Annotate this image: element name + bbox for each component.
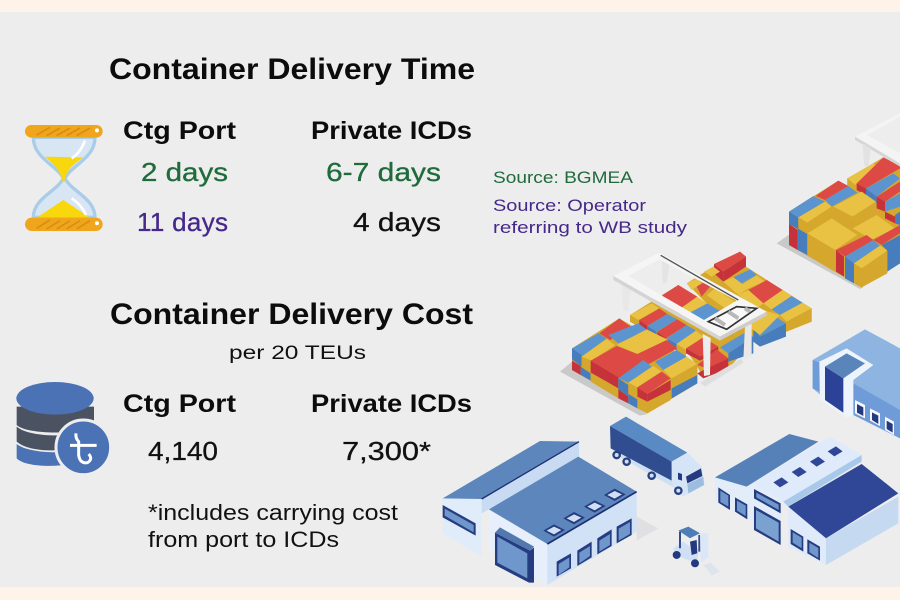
source: operator: referring to WB study	[493, 218, 688, 237]
front containers	[572, 318, 697, 413]
column heading: Ctg Port: Ctg Port	[123, 117, 237, 145]
icon: hourglass	[25, 125, 103, 231]
footnote: *includes carrying cost	[148, 500, 398, 525]
value: 7,300*: 7,300*	[342, 436, 431, 466]
illustration: container yard back stack with crane	[777, 113, 900, 289]
source: operator	[493, 196, 688, 237]
illustration: truck, forklift and warehouses right	[610, 417, 898, 576]
heading: container delivery cost: Container Delivery Cost	[110, 298, 473, 331]
illustration: warehouse bottom left	[443, 441, 658, 585]
crane legs and beam	[613, 253, 767, 387]
warehouse bottom right	[715, 434, 898, 565]
heading: container delivery time: Container Delivery Time	[109, 53, 475, 86]
value: 11 days: 11 days	[137, 207, 228, 237]
value: 2 days: 2 days	[141, 157, 228, 187]
column heading: Ctg Port: Ctg Port	[123, 390, 237, 418]
back containers	[630, 252, 812, 378]
source: BGMEA: Source: BGMEA	[493, 168, 634, 187]
source: operator: Source: Operator	[493, 196, 646, 215]
column heading: Private ICDs: Private ICDs	[311, 117, 472, 145]
forklift	[673, 527, 720, 576]
illustration: warehouse top right	[813, 329, 900, 438]
column heading: Private ICDs: Private ICDs	[311, 390, 472, 418]
truck	[610, 417, 705, 497]
value: 4,140: 4,140	[148, 436, 218, 466]
subheading: per 20 TEUs: per 20 TEUs	[229, 343, 366, 364]
middle containers	[630, 285, 753, 378]
value: 4 days: 4 days	[353, 207, 441, 237]
illustration: container yard front stack with crane	[560, 252, 812, 416]
icon: coin database with taka	[16, 382, 111, 475]
footnote: from port to ICDs	[148, 527, 339, 552]
value: 6-7 days: 6-7 days	[326, 157, 441, 187]
footnote	[148, 500, 398, 552]
